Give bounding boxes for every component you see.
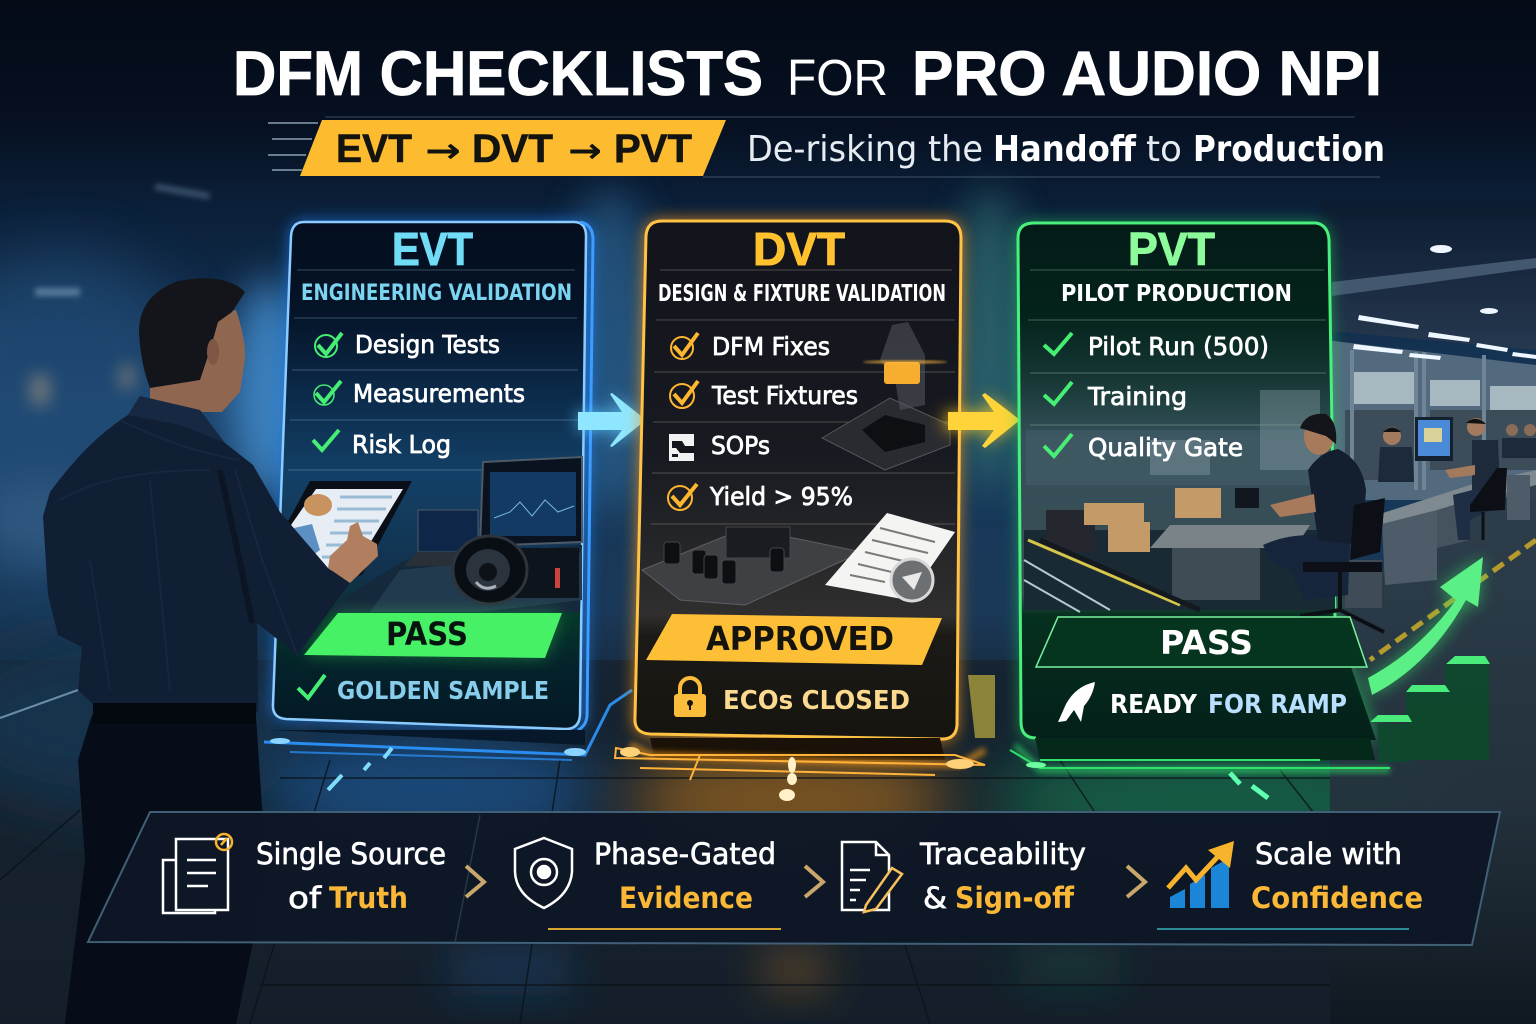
panel: EVT [264,221,632,790]
underline confidence [1157,928,1409,930]
check: pilot run [1044,333,1072,354]
shirt [43,396,350,712]
subtitle text: Handoff [993,129,1137,170]
step: phase-gated evidence: Evidence [619,881,753,915]
APPROVED banner: APPROVED [706,619,894,658]
check: risk log [313,430,339,450]
EVT glow frame [272,221,593,730]
panel: PVT [1010,222,1536,798]
EVT base [264,690,632,790]
PVT subtitle: PILOT PRODUCTION [1061,281,1292,307]
PVT title: PVT [1128,223,1215,275]
hand [328,522,378,583]
check: DFM fixes [671,333,698,359]
head [150,310,245,412]
icon: document and pen [842,842,902,912]
PVT PASS banner: PASS [1160,623,1253,662]
check: design tests [315,333,342,357]
growth arrow [1368,557,1483,695]
icon: growth chart [1168,841,1234,908]
APPROVED banner [646,614,942,665]
EVT checklist [313,330,525,459]
DVT checklist: Yield > 95% [709,482,853,511]
growth bars [1370,656,1490,762]
step: single source of truth [163,834,446,915]
step: scale with confidence: Scale with [1255,837,1402,871]
tablet [286,481,412,581]
floor [0,660,1536,1024]
PVT checklist [1044,332,1269,462]
phase banner: EVT [336,127,412,171]
step: single source of truth: Single Source [256,837,446,871]
phase banner [300,120,726,176]
chevron 3 [1127,866,1145,897]
PASS banner [304,613,562,658]
subtitle text [747,129,1385,170]
icon: documents [163,834,232,913]
EVT subtitle: ENGINEERING VALIDATION [301,281,572,306]
monitor [480,457,582,546]
phase banner: → [568,131,602,171]
hair [139,278,245,388]
EVT checklist: Design Tests [355,330,500,359]
worker two [1378,427,1414,482]
PVT checklist: Training [1087,382,1187,411]
arrow: DVT to PVT [945,393,1020,448]
chevron 2 [805,866,823,897]
small yellow pedestal [968,675,995,738]
step: traceability sign-off [842,837,1086,915]
ECOs closed [674,678,910,717]
fixture illustration [822,322,950,470]
step: single source of truth: of [288,881,322,915]
chevron 1 [466,866,484,897]
DVT checklist: Test Fixtures [711,381,858,410]
DVT checklist [668,332,858,511]
assembly line illustration [1024,390,1335,612]
PVT checklist: Pilot Run (500) [1088,332,1269,361]
factory workers [1263,414,1536,632]
desks [1345,470,1536,608]
PVT base [1010,738,1390,798]
EVT title: EVT [392,223,473,275]
factory background [1320,200,1536,1024]
subtitle text: De-risking the [747,129,983,170]
DVT subtitle: DESIGN & FIXTURE VALIDATION [658,281,946,307]
golden sample: GOLDEN SAMPLE [337,676,549,705]
PASS banner: PASS [386,615,468,653]
phase banner: PVT [614,127,692,171]
step: phase-gated evidence: Phase-Gated [594,837,776,871]
worker three [1445,418,1507,540]
worker seated front [1263,414,1385,632]
collar [128,396,225,443]
DVT checklist: DFM Fixes [712,332,830,361]
DVT base [615,738,985,801]
EVT checklist: Risk Log [352,430,451,459]
monitor [1415,417,1453,461]
trousers [65,715,270,1024]
step: phase-gated evidence [515,837,776,915]
check: measurements [314,381,341,405]
icon: shield [515,838,572,908]
subtitle band [268,117,1385,177]
icon: SOP document [669,434,694,461]
PCB and report illustration [642,513,955,605]
title [233,39,1382,109]
step: scale with confidence: Confidence [1251,881,1423,915]
bottom summary bar [88,812,1500,945]
title: FOR [787,49,888,106]
step: single source of truth: Truth [329,881,408,915]
DVT title: DVT [753,223,845,275]
underline evidence [548,928,781,930]
person with tablet [43,278,378,1024]
step: traceability sign-off: & [923,881,947,915]
ready for ramp: FOR RAMP [1208,690,1347,720]
check: yield [668,484,697,510]
ready for ramp: READY [1110,690,1198,720]
subtitle text: Production [1193,129,1385,170]
PVT checklist: Quality Gate [1088,433,1243,462]
EVT checklist: Measurements [353,379,525,408]
far workers [1502,424,1536,458]
EVT workbench illustration [330,457,582,612]
ear [207,339,219,365]
check: quality gate [1044,434,1072,456]
panel: DVT [615,220,995,801]
arrow: EVT to DVT [578,393,646,447]
DVT checklist: SOPs [711,431,770,460]
ready for ramp [1058,682,1347,722]
speaker [453,536,579,604]
icon: lock [674,678,706,717]
check: test fixtures [670,381,698,408]
icon: rocket [1058,682,1095,722]
step: traceability sign-off: Sign-off [955,881,1074,915]
subtitle text: to [1146,129,1182,170]
ECOs closed: ECOs CLOSED [723,686,910,716]
DVT glow frame [634,220,962,740]
laptop [404,510,478,566]
step: scale with confidence [1168,837,1423,915]
step: traceability sign-off: Traceability [919,837,1086,871]
title: PRO AUDIO NPI [912,39,1382,109]
PVT glow frame [1017,222,1378,740]
PVT PASS banner [1036,617,1367,667]
phase banner: → [425,131,461,171]
check: training [1044,382,1072,404]
phase banner: DVT [472,127,553,171]
title: DFM CHECKLISTS [233,39,763,109]
